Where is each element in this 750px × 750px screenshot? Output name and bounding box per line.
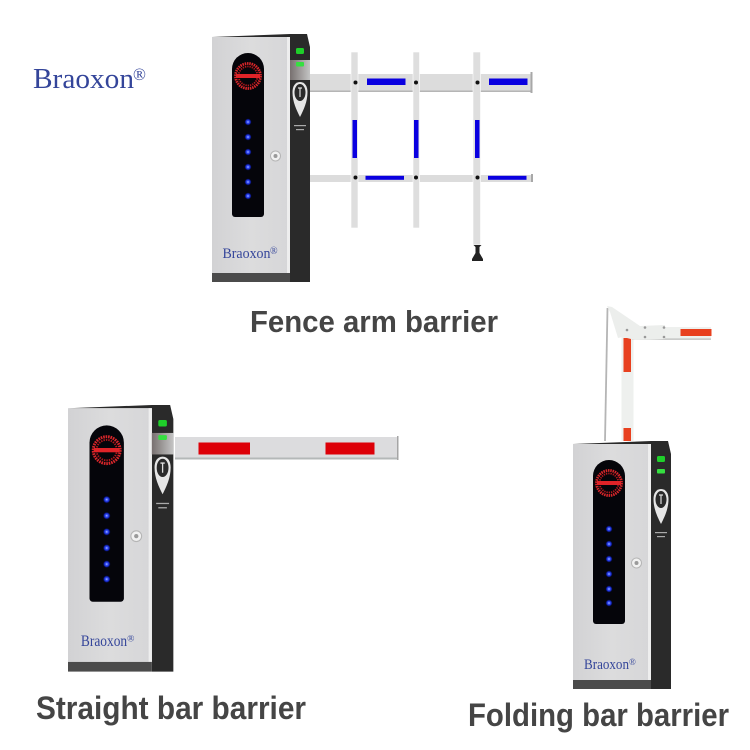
logo: Braoxon brand: Braoxon	[33, 64, 134, 95]
caption: folding bar barrier: Folding bar barrier	[468, 697, 729, 733]
barrier cabinet: folding bar: Braoxon	[584, 657, 630, 673]
horizontal section	[632, 327, 712, 340]
barrier cabinet: fence arm	[212, 34, 310, 282]
barrier cabinet: straight bar	[68, 405, 173, 672]
hinge bracket	[607, 306, 665, 340]
barrier cabinet: folding bar: ®	[629, 657, 636, 667]
support rod	[605, 308, 608, 441]
barrier cabinet: folding bar	[573, 441, 671, 689]
barrier cabinet: straight bar: ®	[127, 634, 134, 645]
folding arm	[605, 306, 712, 441]
barrier cabinet: straight bar: Braoxon	[81, 633, 127, 650]
caption: fence arm barrier: Fence arm barrier	[250, 304, 498, 339]
fence arm	[310, 52, 533, 261]
logo: Braoxon brand: ®	[133, 65, 146, 84]
caption: straight bar barrier: Straight bar barrier	[36, 690, 306, 726]
barrier cabinet: fence arm: ®	[270, 246, 278, 257]
vertical section	[622, 337, 634, 441]
support foot	[472, 245, 483, 261]
vertical pickets	[351, 52, 480, 245]
straight arm	[175, 436, 398, 460]
upper horizontal rail	[310, 72, 532, 93]
barrier cabinet: fence arm: Braoxon	[222, 246, 271, 262]
lower horizontal rail	[310, 174, 533, 182]
